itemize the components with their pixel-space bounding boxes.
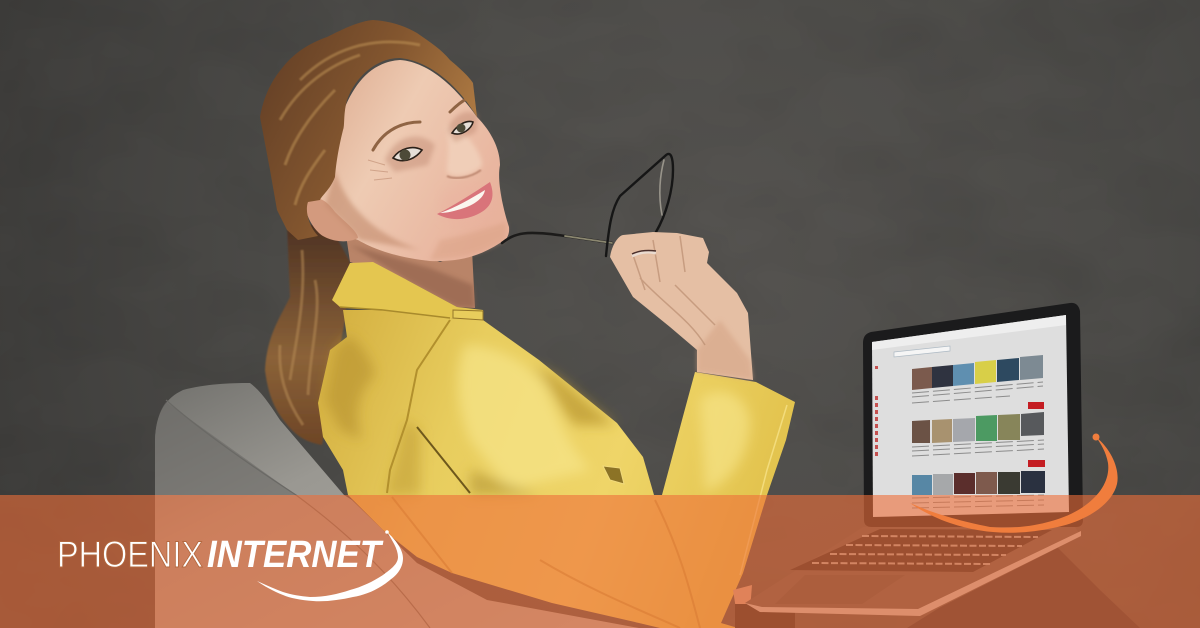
jacket folds in banner [392, 497, 700, 628]
jeans under laptop [907, 547, 1140, 628]
face [318, 60, 509, 261]
eyeglasses [502, 154, 673, 256]
woman: ponytail [265, 225, 350, 445]
teeth [440, 190, 485, 213]
sidebar icons [875, 366, 878, 456]
orange swoosh arc with dot [910, 434, 1118, 533]
logo wordmark light: PHOENIX [57, 534, 203, 575]
logo wordmark bold: INTERNET [207, 534, 384, 576]
subscribe button row 2 [1028, 402, 1044, 409]
eye: left [393, 148, 422, 161]
ear [305, 198, 358, 241]
armchair [155, 383, 639, 628]
laptop [745, 303, 1083, 616]
browser bar [872, 315, 1066, 350]
hand [610, 232, 753, 380]
eye shadow [385, 112, 478, 172]
video thumbnails row 3 [912, 471, 1045, 495]
keyboard [790, 529, 1052, 572]
video thumbnails row 1 [912, 355, 1043, 390]
laptop lid [863, 303, 1083, 527]
trackpad [775, 575, 905, 604]
woman: yellow leather jacket [318, 262, 795, 628]
jacket body [318, 310, 795, 628]
jaw shading [325, 170, 420, 250]
screen [872, 315, 1069, 517]
crow's feet lines [368, 160, 392, 180]
jacket shading [325, 335, 750, 495]
brows [373, 98, 468, 150]
laptop base [745, 527, 1081, 615]
orange translucent banner [0, 495, 1200, 628]
jacket zipper [603, 466, 624, 484]
woman: neck [345, 228, 475, 308]
collar strap [453, 310, 483, 320]
logo swoosh [257, 532, 403, 601]
logo: Phoenix Internet [57, 530, 403, 601]
subscribe button row 3 [1028, 460, 1045, 467]
fingers and phone under laptop [733, 585, 795, 628]
lips [437, 182, 493, 219]
chin shading [430, 222, 507, 260]
nose [445, 125, 482, 176]
woman: hand holding glasses [502, 154, 753, 380]
ring [632, 252, 656, 256]
jacket seams [387, 320, 450, 493]
hair over head [260, 20, 477, 240]
video caption lines [912, 382, 1044, 508]
video thumbnails row 2 [912, 412, 1044, 443]
eye: right [452, 121, 473, 134]
woman: head [260, 20, 509, 261]
jacket collar [332, 262, 483, 320]
cheek blush [440, 185, 496, 225]
